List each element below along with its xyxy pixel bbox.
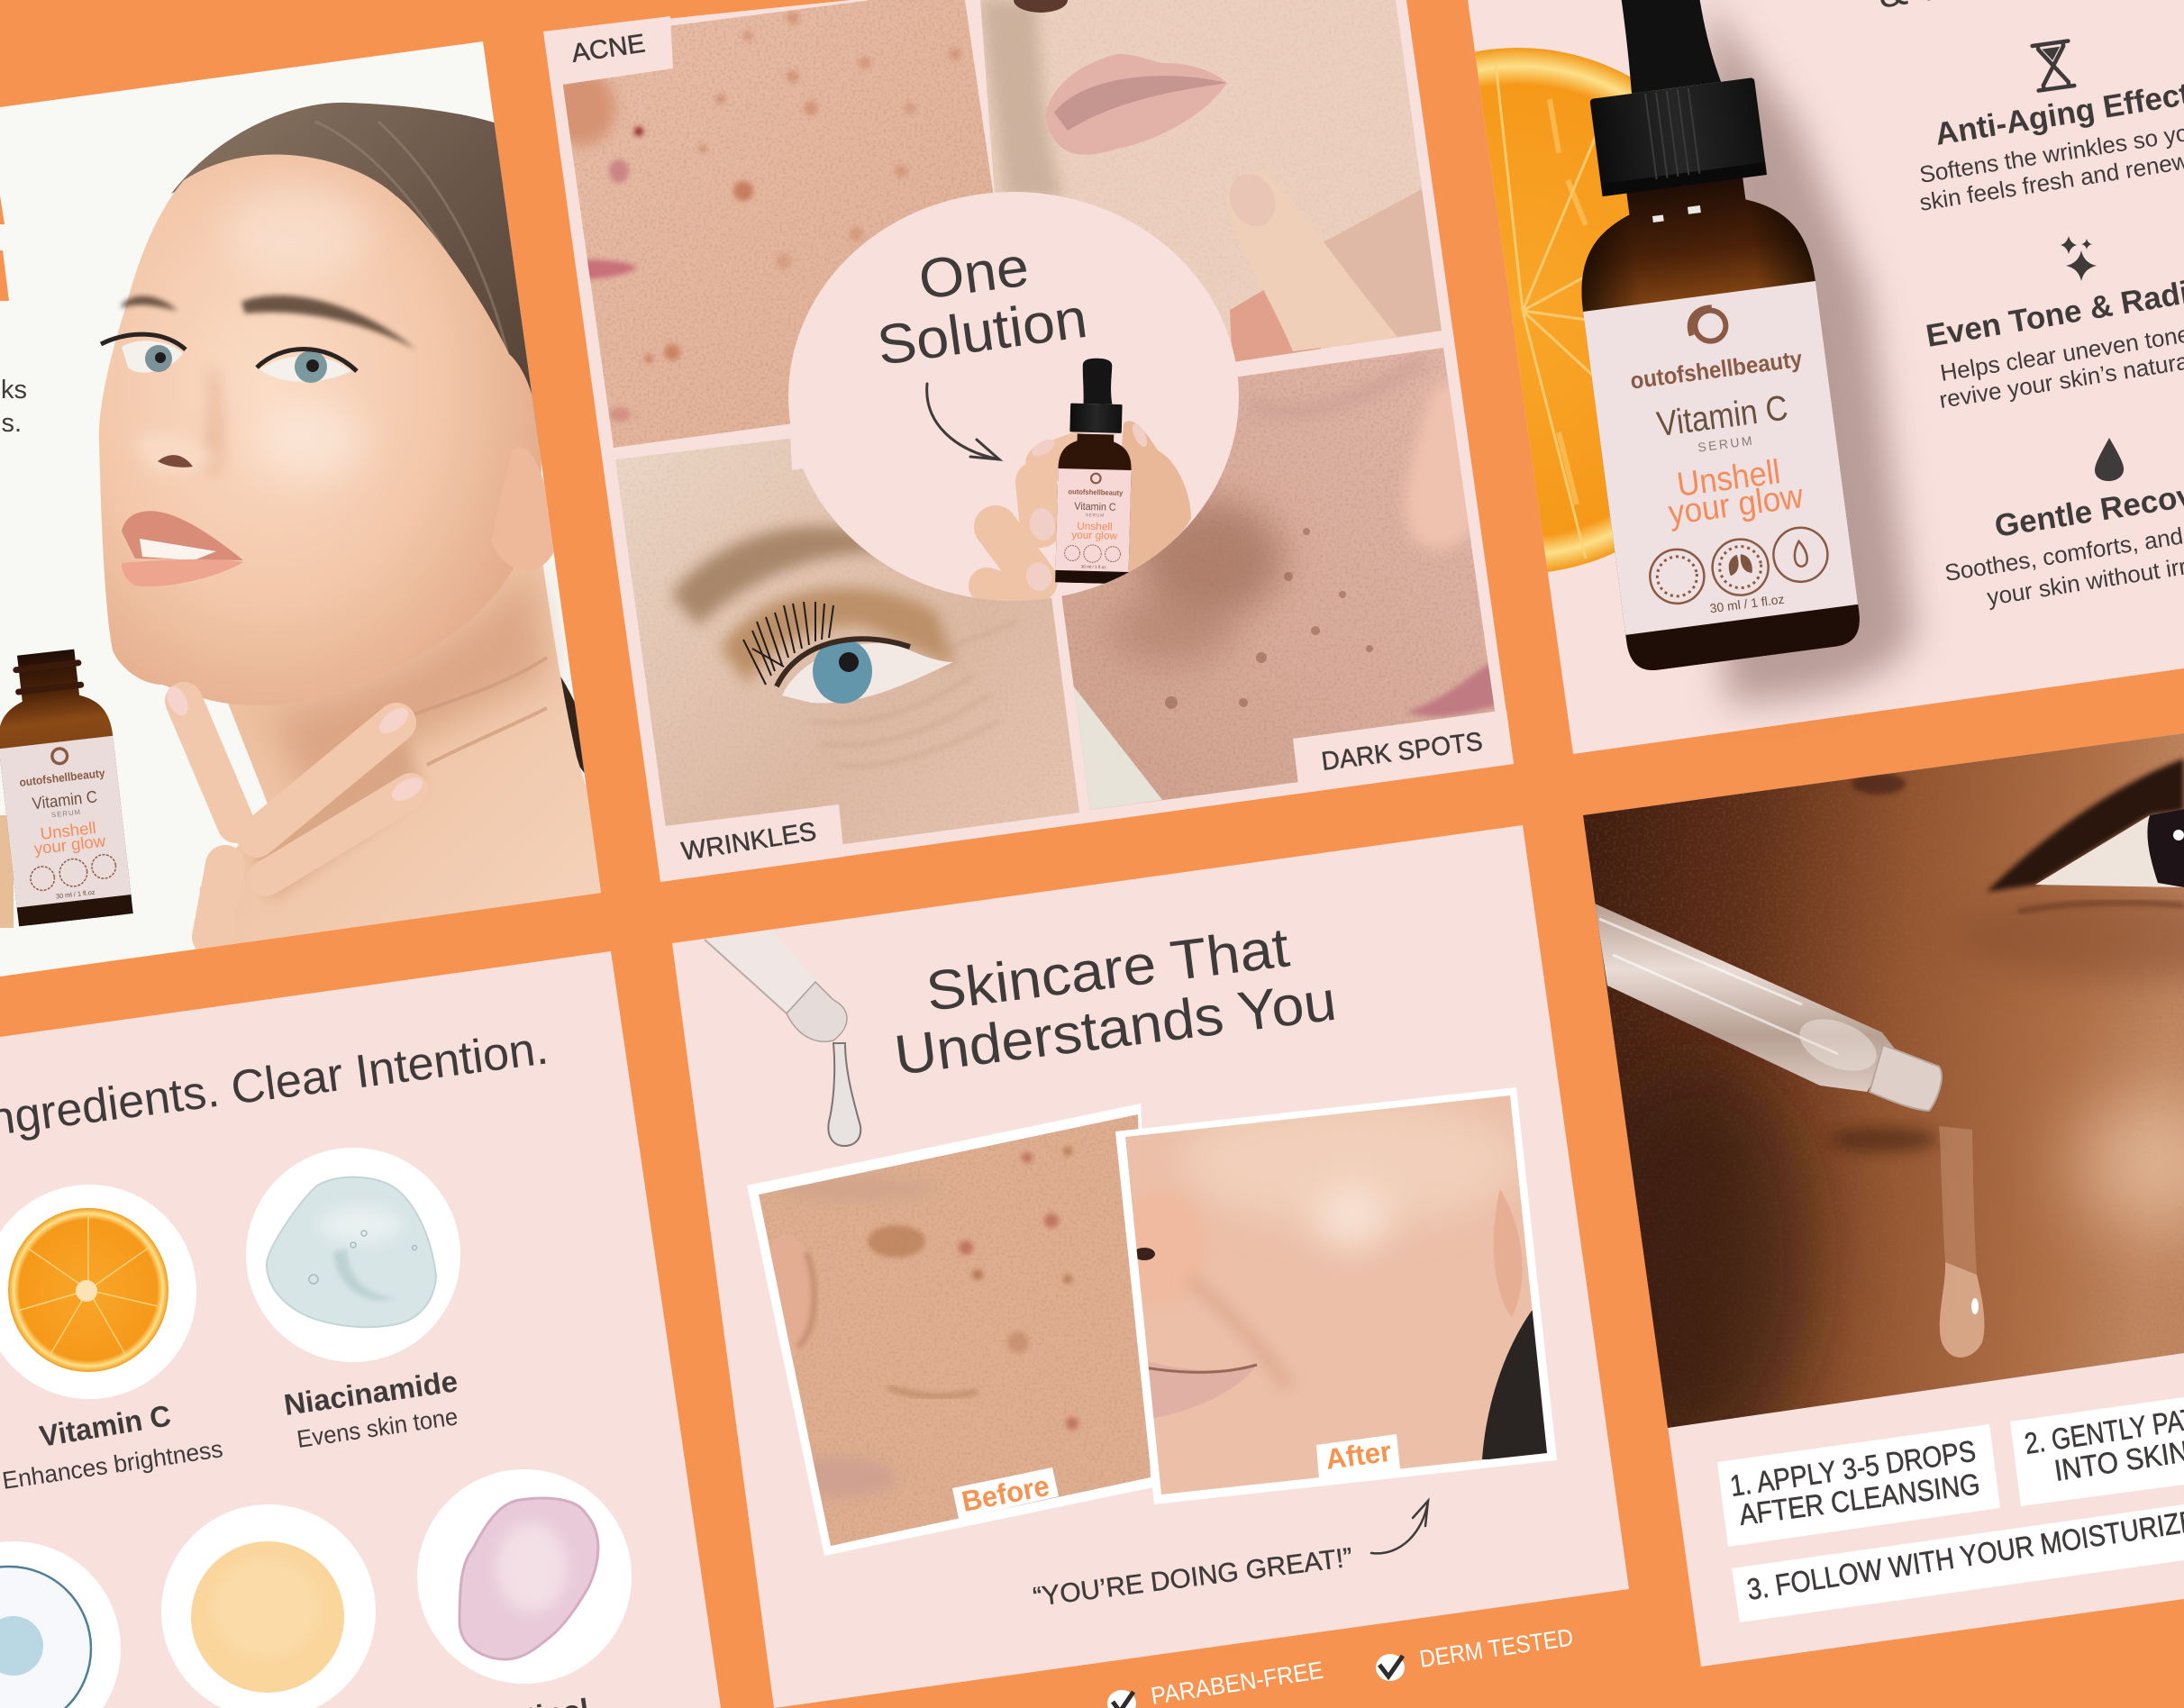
lips (1045, 54, 1227, 155)
after tag: After (1324, 1435, 1393, 1476)
small bottle: outofshellbeauty (19, 766, 106, 789)
quote: “YOU’RE DOING GREAT!” (1032, 1542, 1354, 1613)
heading: one solution (874, 236, 1091, 377)
label (1583, 281, 1858, 635)
brow fragment (1852, 773, 1906, 795)
blotches (868, 1147, 1078, 1430)
small bottle: Vitamin C (32, 786, 98, 813)
serum bottle, small: outofshellbeauty (1068, 487, 1124, 497)
model: ear (496, 450, 553, 568)
base (1625, 603, 1863, 674)
dropper shadow (1829, 1127, 1937, 1152)
ingredient: niacinamide: Evens skin tone (296, 1403, 460, 1453)
panel: how to use (1577, 721, 2184, 1667)
ingredient: vitamin c: Enhances brightness (0, 1435, 224, 1494)
model: neck and shoulder (200, 566, 601, 949)
tan tube fragment (0, 815, 14, 928)
stubble shadow (980, 0, 1063, 198)
model: highlights (225, 189, 369, 482)
ingredient: yellow serum (161, 1504, 376, 1708)
dropper (1595, 904, 1942, 1111)
heading: one solution: One (915, 236, 1033, 312)
hair (1482, 1302, 1559, 1459)
lip (1406, 653, 1505, 716)
step 1: 1. APPLY 3-5 DROPS (1728, 1434, 1978, 1503)
circle: one solution (788, 192, 1239, 601)
acne nose shadow (547, 70, 615, 146)
wrinkle lines (811, 622, 1018, 767)
hand: palm and thumb (1117, 421, 1191, 577)
orange half (1273, 48, 1763, 574)
nostril (1133, 1248, 1155, 1260)
lashes (743, 602, 833, 685)
model: lips (122, 511, 243, 586)
serum bottle, small: Vitamin C (1074, 500, 1116, 513)
panel: benefits (1273, 0, 2184, 754)
headline fragments (0, 195, 9, 301)
small bottle: your glow (33, 831, 107, 858)
shine (1315, 1185, 1388, 1248)
panel: skin concerns collage (541, 0, 1514, 883)
model: nose (135, 433, 216, 473)
area under chin (1230, 270, 1324, 369)
hand: nails (1023, 422, 1150, 594)
cap ribs (1645, 88, 1699, 179)
glass edge shading (1571, 192, 1815, 312)
acne lip (577, 259, 638, 279)
hand: fingers (987, 452, 1077, 595)
serum bottle, large (1533, 0, 1863, 674)
model: nails (163, 683, 426, 805)
nose base (1014, 0, 1068, 13)
photo: dark spots (1027, 333, 1514, 820)
eyelid (721, 587, 955, 685)
nasolabial fold (1189, 1279, 1288, 1387)
heading: Clear Intention. (228, 1022, 551, 1114)
logo (1688, 305, 1727, 343)
label: acne: ACNE (569, 29, 647, 68)
cap (1589, 77, 1766, 190)
model: eyes (101, 334, 357, 383)
label: dark spots (1293, 710, 1514, 793)
heading: one solution: Solution (874, 287, 1091, 377)
fine freckles (1165, 528, 1373, 709)
small bottle: 30 ml / 1 fl.oz (55, 888, 96, 901)
after top skin (1180, 1099, 1523, 1225)
finger (1226, 171, 1398, 351)
drip (1939, 1126, 1984, 1358)
heading: Understands You (891, 970, 1340, 1087)
panel: before and after (672, 825, 1629, 1708)
model: brows (122, 295, 416, 350)
model: hair (171, 103, 588, 775)
ingredient: hyaluronic dish (0, 1541, 121, 1708)
product name: Vitamin C (1654, 388, 1790, 444)
copy fragments: s. (1, 409, 22, 438)
step 2 (2010, 1397, 2184, 1506)
benefit: gentle recovery: Soothes, comforts, and (1943, 522, 2184, 586)
ingredient: vitamin c (0, 1185, 224, 1494)
ingredient: vitamin c: Vitamin C (37, 1398, 173, 1453)
benefit: even tone (1924, 263, 2184, 413)
benefit: anti-aging (1917, 77, 2184, 216)
ingredient: niacinamide: Niacinamide (282, 1364, 460, 1422)
photo: dry skin and finger (973, 0, 1451, 396)
lip (779, 1458, 896, 1497)
pipette with drop (705, 931, 860, 1146)
trust badges row (869, 1623, 1575, 1708)
eye (777, 639, 953, 704)
arrow (927, 384, 999, 459)
small bottle (0, 646, 133, 926)
copy fragments (2, 379, 26, 432)
model: hand (184, 701, 411, 937)
copy fragments: ks (1, 376, 27, 404)
eye shadow (775, 1176, 937, 1203)
eye (1987, 759, 2184, 912)
model: nose shadow (201, 369, 228, 477)
volume: 30 ml / 1 fl.oz (1709, 592, 1785, 615)
acne spots (609, 12, 961, 422)
small bottle: Unshell (40, 818, 97, 843)
nose (759, 1234, 813, 1360)
photo: acne (541, 0, 1009, 459)
ingredient: niacinamide (246, 1148, 460, 1453)
model: neck creases (414, 658, 547, 765)
tagline (1663, 450, 1806, 532)
small bottle: SERUM (50, 808, 81, 819)
corner background (1072, 685, 1162, 810)
serum bottle, small: SERUM (1086, 513, 1105, 519)
label: dark spots: DARK SPOTS (1320, 727, 1484, 777)
panel: model portrait with serum (0, 36, 622, 982)
icon: hourglass (2033, 41, 2074, 91)
before photo (739, 1099, 1162, 1558)
serum bottle, small: your glow (1071, 528, 1118, 542)
hand holding serum (987, 358, 1191, 595)
model: face (99, 154, 541, 705)
fingernail (1222, 167, 1283, 233)
label: wrinkles: WRINKLES (679, 817, 818, 867)
label: acne (543, 16, 673, 85)
benefit: gentle recovery (1943, 470, 2184, 611)
heading (891, 916, 1340, 1087)
nose (1406, 378, 1487, 550)
tagline: your glow (1666, 477, 1806, 532)
badge: derm tested: DERM TESTED (1418, 1623, 1575, 1673)
ear (1494, 1189, 1522, 1317)
model: hand shadow (252, 739, 423, 901)
glass body (1569, 169, 1863, 674)
left shadow (1577, 1063, 1811, 1459)
panel: ingredients (0, 951, 721, 1708)
label: wrinkles (660, 804, 844, 882)
step 1: AFTER CLEANSING (1737, 1467, 1982, 1531)
heading (0, 1022, 551, 1168)
eye-fold crease (1252, 360, 1424, 411)
under-eye warm band (1955, 892, 2184, 982)
pigmentation blotch (1140, 500, 1284, 617)
step 1 (1717, 1424, 2000, 1547)
brand: outofshellbeauty (1629, 345, 1804, 395)
cheek fold (887, 1387, 978, 1396)
nose (1117, 1189, 1207, 1306)
serum bottle, small (1055, 358, 1134, 584)
serum bottle, small: Unshell (1077, 520, 1113, 533)
model: neck shadow (270, 568, 550, 802)
icon: sparkles (2061, 236, 2097, 281)
after photo (1115, 1087, 1559, 1504)
brow (671, 526, 901, 626)
tagline: Unshell (1675, 453, 1782, 504)
photo: eye wrinkles (595, 396, 1099, 883)
photo: dropper on skin (1577, 721, 2184, 1459)
badge: derm tested (1376, 1623, 1575, 1681)
mouth (1144, 1360, 1257, 1419)
badges (1646, 524, 1832, 607)
glass highlights (1652, 205, 1701, 223)
arrow (1371, 1501, 1428, 1553)
icon: drop (2095, 438, 2124, 481)
background behind jaw (1315, 189, 1451, 360)
ingredient: retinol (417, 1469, 632, 1708)
serum bottle, small: 30 ml / 1 fl.oz (1081, 564, 1106, 569)
serum caption: SERUM (1697, 432, 1755, 455)
bottle shadow (1706, 0, 1915, 703)
cheek highlight (2077, 1099, 2184, 1225)
before tag: Before (959, 1469, 1052, 1518)
dropper bulb (1610, 0, 1721, 94)
heading: Skincare That (923, 916, 1293, 1023)
